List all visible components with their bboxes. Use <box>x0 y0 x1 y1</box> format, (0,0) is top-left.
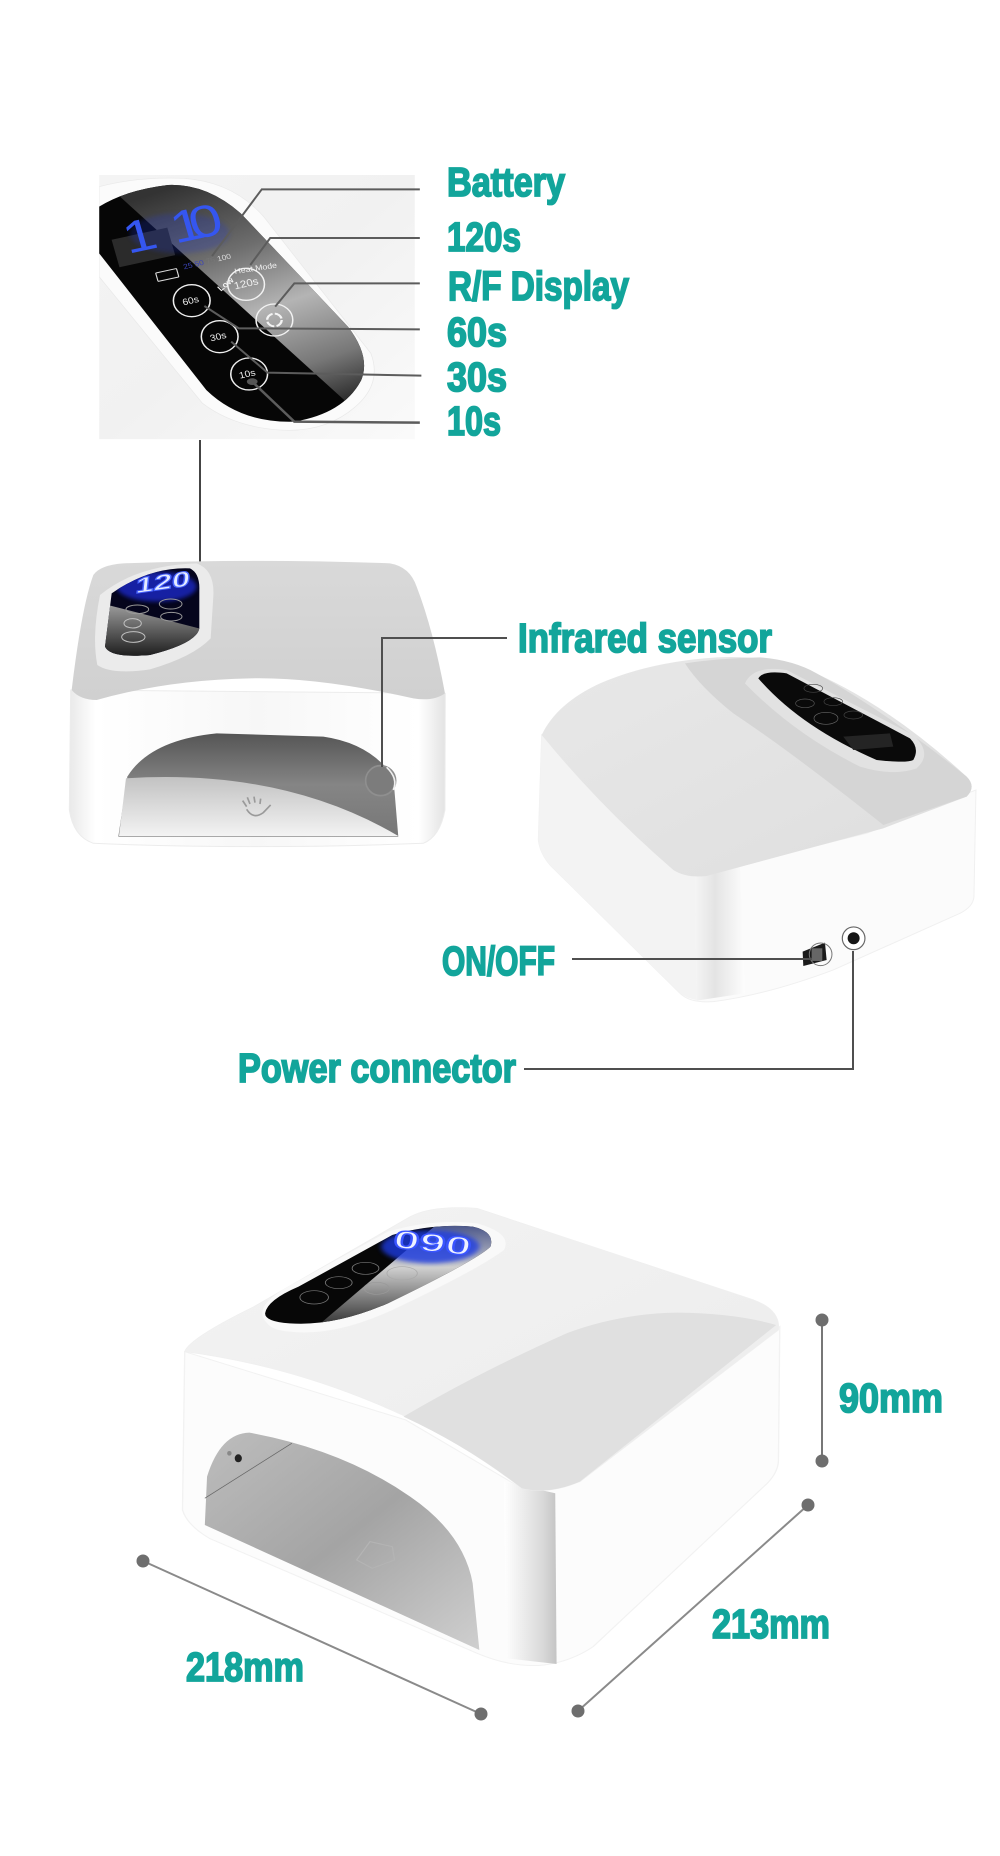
label: 218mm: 218mm <box>186 1644 304 1690</box>
display digits 110: 110 <box>117 194 229 264</box>
display halo <box>745 669 924 772</box>
lamp body <box>182 1327 780 1666</box>
lamp body <box>69 690 445 847</box>
lamp opening <box>118 733 398 837</box>
lamp body <box>538 735 976 1002</box>
dimension: width 218mm <box>136 1554 488 1720</box>
leader line: power connector <box>524 951 853 1069</box>
product: lamp three-quarter view <box>182 1208 780 1666</box>
label: ON/OFF: ON/OFF <box>442 938 555 984</box>
digits 120: 120 <box>134 565 192 598</box>
button: 30s: 30s <box>209 331 228 344</box>
label: R/F Display: R/F Display <box>448 263 629 309</box>
battery icon <box>156 269 179 281</box>
body corner shading <box>695 867 745 1001</box>
button: 10s <box>231 358 268 390</box>
product: lamp front view <box>69 561 445 847</box>
button: R/F display <box>256 304 293 336</box>
button: Low Heat Mode 120s <box>215 261 278 300</box>
lamp top <box>542 657 972 876</box>
button: 60s: 60s <box>181 295 200 308</box>
display halo <box>95 563 213 671</box>
button: Low Heat Mode 120s: Heat Mode <box>234 261 278 276</box>
dimension: height 90mm <box>816 1314 828 1468</box>
panel: control panel close-up <box>99 170 424 439</box>
lamp top <box>72 561 445 700</box>
display <box>265 1226 492 1324</box>
button: 10s: 10s <box>238 368 257 381</box>
leader line: ON/OFF <box>572 958 812 960</box>
button: 60s <box>173 285 210 317</box>
label: 120s: 120s <box>447 214 521 260</box>
icon: hand <box>243 797 271 816</box>
digits 090: 090 <box>391 1226 474 1261</box>
battery levels: 25 50 75 100 <box>182 252 233 271</box>
label: 60s: 60s <box>447 309 507 355</box>
button: Low Heat Mode 120s: 120s <box>233 276 260 292</box>
display: black glossy touch panel <box>99 184 364 422</box>
leader line: infrared sensor <box>382 638 507 767</box>
lamp top <box>185 1208 779 1491</box>
power jack <box>842 927 865 950</box>
infrared sensor marker <box>366 766 396 796</box>
button: 30s <box>201 321 238 353</box>
connector: close-up to lamp <box>199 440 201 582</box>
display halo <box>262 1222 506 1332</box>
label: 30s: 30s <box>447 354 507 400</box>
leader lines for panel labels <box>204 189 421 423</box>
product: lamp rear view <box>538 657 976 1002</box>
label: 213mm: 213mm <box>712 1601 830 1647</box>
button: Low Heat Mode 120s: Low <box>215 275 236 293</box>
lamp opening <box>205 1433 479 1650</box>
label: Power connector: Power connector <box>238 1045 516 1091</box>
label: 90mm: 90mm <box>839 1375 943 1421</box>
switch: ON/OFF <box>803 943 832 966</box>
corner shading <box>504 1482 557 1664</box>
display <box>105 568 200 656</box>
display <box>758 672 916 762</box>
label: Infrared sensor: Infrared sensor <box>518 615 772 661</box>
label: 10s: 10s <box>447 398 501 444</box>
label: Battery: Battery <box>447 159 565 205</box>
dimension: depth 213mm <box>572 1498 814 1718</box>
